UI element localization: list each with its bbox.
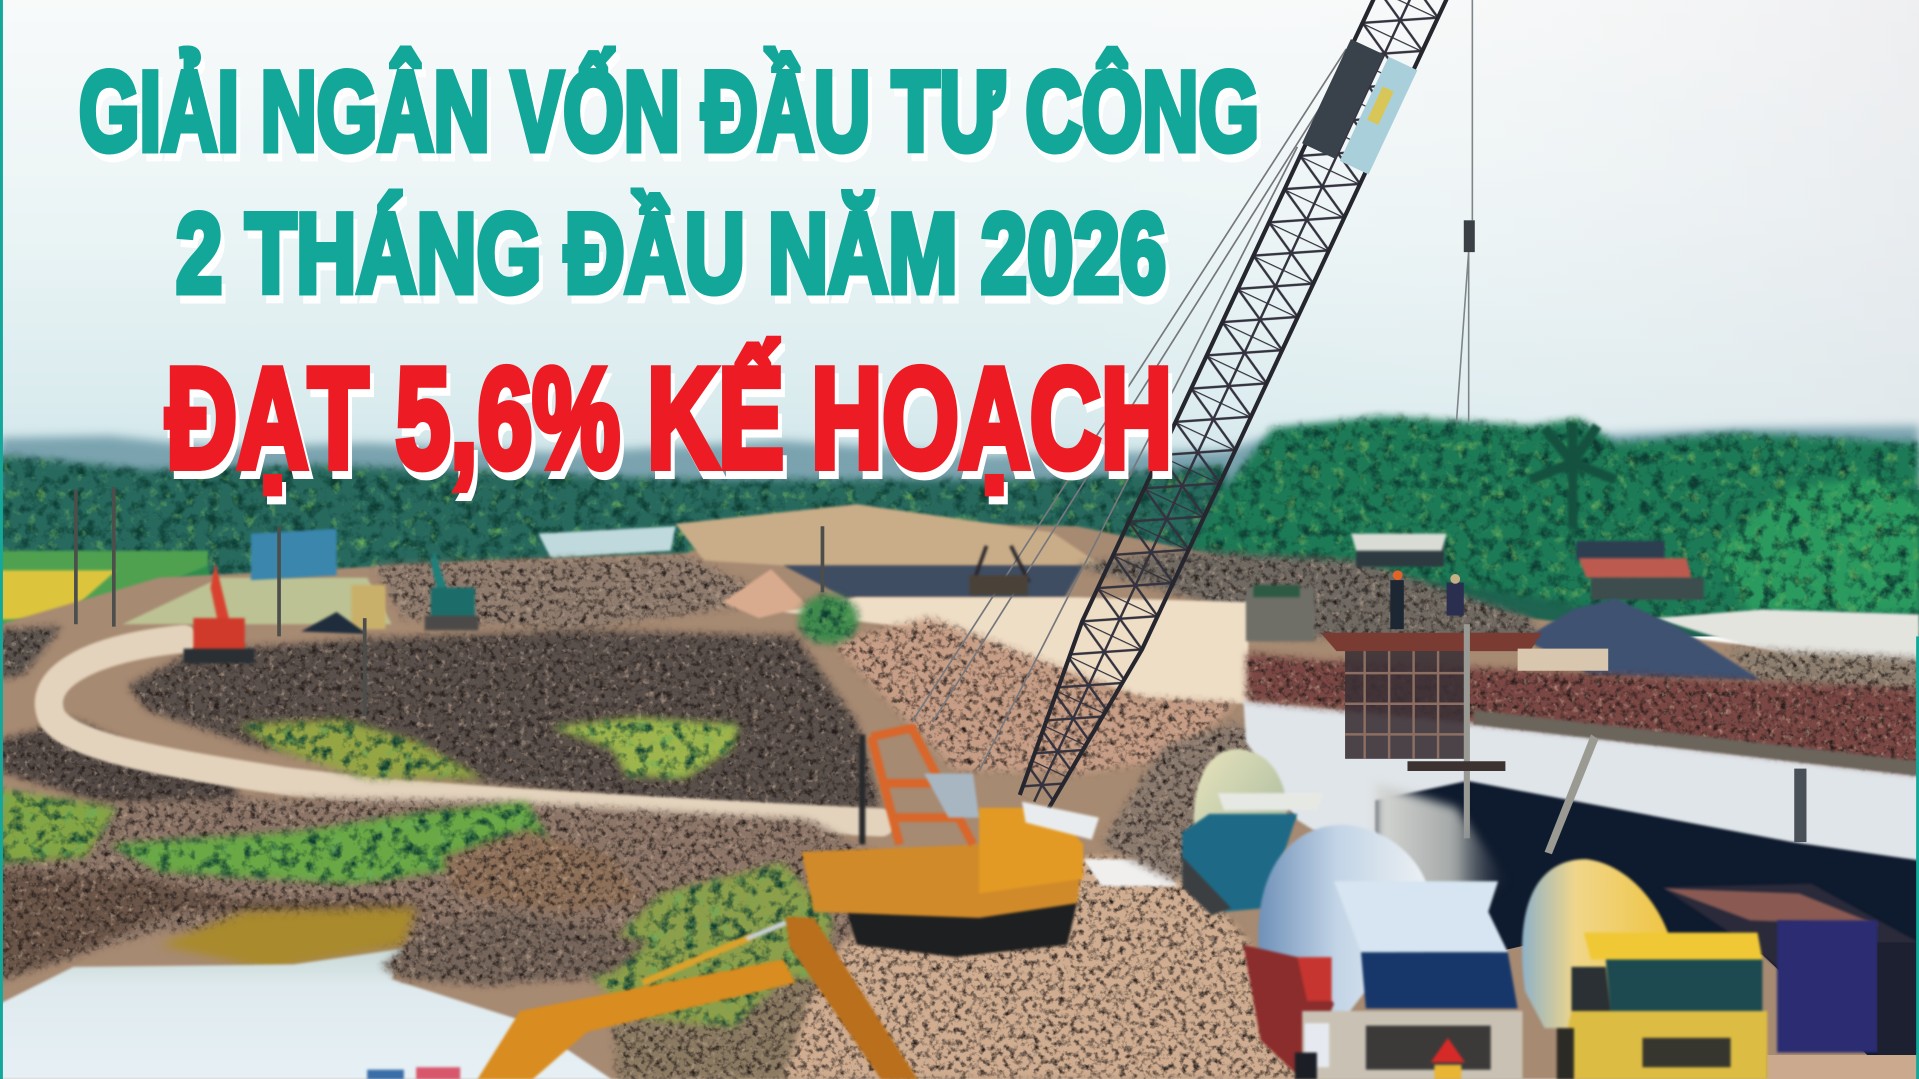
truck: rear mixer <box>1182 749 1324 915</box>
crawler tracks <box>844 903 1077 957</box>
windshield <box>1361 952 1518 1008</box>
hull <box>802 844 1083 918</box>
distant hills <box>0 426 1919 526</box>
base ground <box>0 520 1919 1079</box>
red side panel <box>1243 945 1334 1079</box>
hydraulic ram <box>643 936 753 983</box>
A frame <box>871 728 973 844</box>
palm tree <box>1530 422 1616 529</box>
blue container <box>1777 920 1877 1053</box>
warning triangle <box>1431 1038 1465 1062</box>
yellow roller <box>301 585 386 634</box>
tree line left <box>0 455 1248 587</box>
tree underlay <box>0 490 1919 636</box>
cab <box>979 808 1083 893</box>
grab bucket <box>969 546 1028 595</box>
bridge white face <box>1243 700 1919 869</box>
boom banner <box>1302 39 1384 159</box>
pale sand work area <box>722 569 1248 704</box>
hanging hook cable <box>1456 0 1475 422</box>
headline figure: ĐẠT 5,6% KẾ HOẠCH <box>166 338 1172 498</box>
rear cab <box>1182 814 1297 912</box>
boom <box>477 960 796 1079</box>
rear drum <box>1194 749 1288 869</box>
foreground sandy ground <box>783 857 1297 1079</box>
pond water <box>0 949 612 1079</box>
soil left bank <box>0 871 441 979</box>
front panel <box>1557 1011 1767 1079</box>
bright tree crowns lower right <box>1713 477 1919 612</box>
black geotextile <box>783 565 1083 597</box>
centre drum <box>1258 825 1432 1016</box>
far houses <box>1351 534 1704 600</box>
title block <box>79 49 1259 498</box>
stick <box>786 917 918 1079</box>
yellow drum <box>1522 859 1674 1028</box>
pond right soil <box>612 979 832 1079</box>
boat at the pond edge <box>367 1067 460 1079</box>
crane boom <box>1001 0 1452 817</box>
red excavator <box>184 563 255 663</box>
gravel pile <box>1524 598 1762 680</box>
bush <box>799 595 858 644</box>
winding dirt road <box>49 639 881 822</box>
cab top <box>1334 881 1508 952</box>
rebar on deck <box>1247 654 1919 774</box>
dump truck <box>1246 585 1314 641</box>
workers <box>1390 570 1464 629</box>
tree line right <box>1175 416 1919 649</box>
pendant cables <box>912 47 1359 771</box>
foreground excavator arm <box>477 917 918 1079</box>
reddish sand slope <box>832 618 1236 774</box>
golden shallows <box>159 908 416 969</box>
gravel ridge behind the bridge <box>1077 551 1542 643</box>
rice field <box>0 551 211 627</box>
sky <box>0 0 1919 514</box>
title line 1: GIẢI NGÂN VỐN ĐẦU TƯ CÔNG <box>79 49 1259 174</box>
scaffolding <box>1321 624 1608 838</box>
bridge dark underside <box>1371 778 1919 1077</box>
truck: yellow mixer <box>1522 859 1767 1079</box>
cab roof <box>1584 933 1762 960</box>
left soil mound <box>0 720 245 808</box>
grass patches <box>0 717 832 1053</box>
small excavators <box>184 551 479 663</box>
dark soil mound <box>129 630 881 813</box>
rubble beside abutment <box>1102 722 1334 881</box>
lattice <box>1004 0 1448 816</box>
windshield <box>1606 960 1762 1011</box>
mid soil <box>373 557 783 630</box>
title line 2: 2 THÁNG ĐẦU NĂM 2026 <box>176 191 1166 316</box>
truck: centre mixer <box>1243 825 1523 1079</box>
lower field soil <box>0 798 881 979</box>
blue shed <box>251 529 337 580</box>
dust plume <box>1376 783 1508 930</box>
utility poles <box>76 487 822 716</box>
crawler crane body <box>802 728 1099 957</box>
teal excavator <box>425 551 479 630</box>
brush <box>443 830 643 912</box>
red container <box>1662 884 1919 1053</box>
sandy plateau and river <box>122 504 1102 624</box>
white settling pond <box>1655 610 1919 661</box>
central soil bank <box>382 912 649 985</box>
rebar underside edge <box>1474 710 1919 776</box>
bridge <box>1243 570 1919 1077</box>
front <box>1302 1011 1523 1079</box>
sand at lower right <box>1767 1055 1919 1079</box>
gray soil strip <box>1726 649 1919 698</box>
